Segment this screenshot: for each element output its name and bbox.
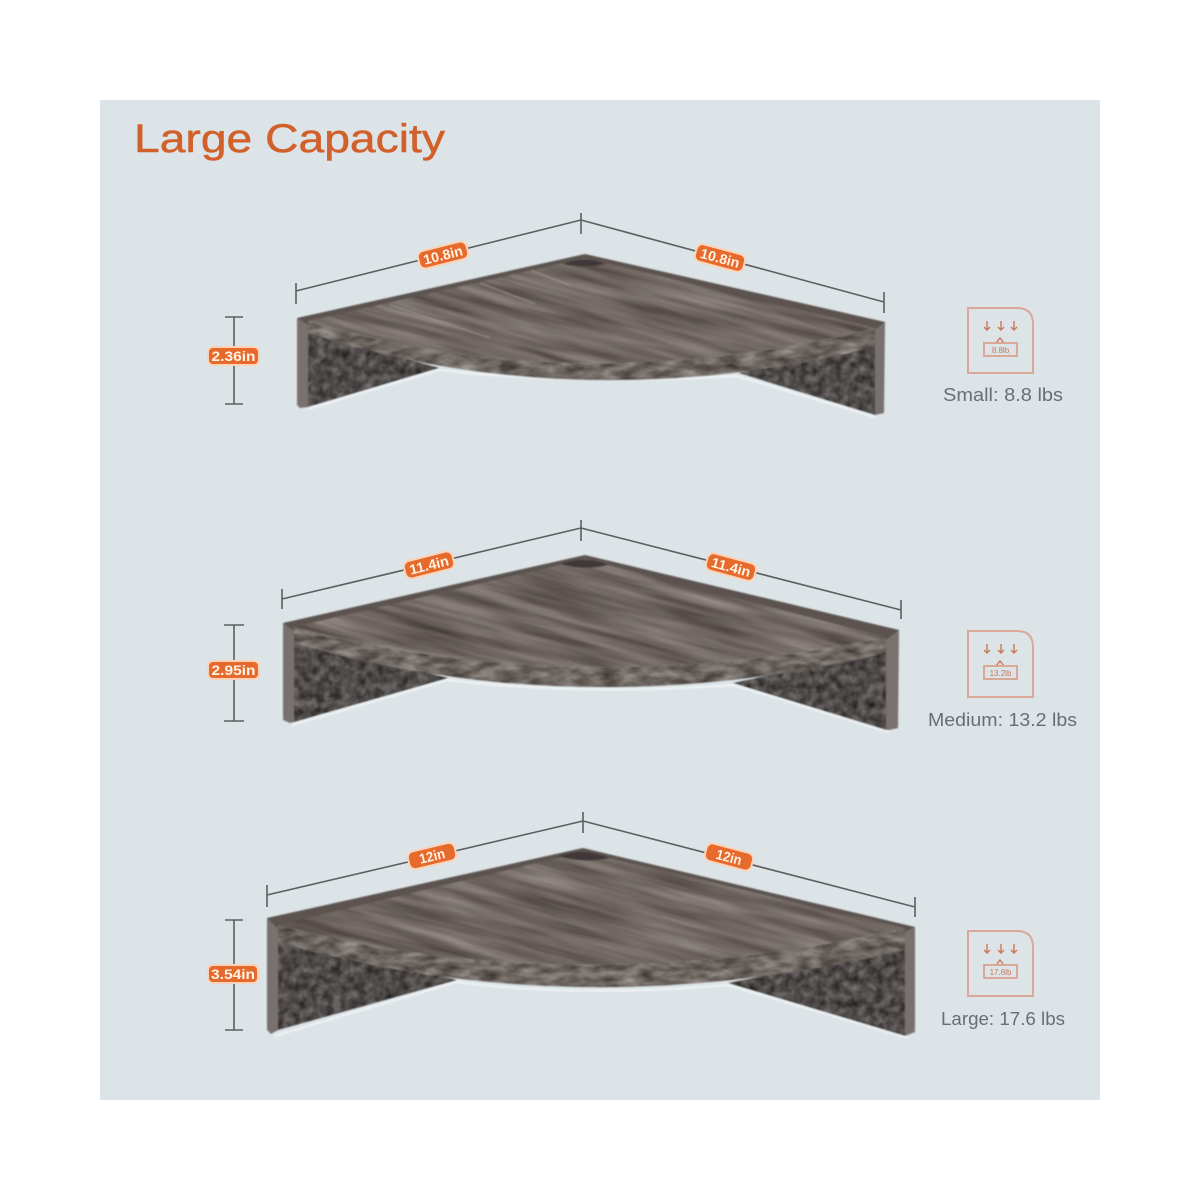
- panel: background: [100, 100, 1100, 1100]
- large width dimension left: 12in: [417, 845, 447, 867]
- large height dimension: [208, 920, 258, 1030]
- large width dimension right: [583, 821, 915, 917]
- medium height dimension: 2.95in: [212, 662, 256, 678]
- icon: small weight capacity: 8.8lb: [992, 346, 1010, 355]
- medium width dimension right: 11.4in: [710, 554, 752, 580]
- icon: large weight capacity: 17.6lb: [990, 968, 1012, 977]
- icon: small weight capacity: [968, 308, 1033, 373]
- medium height dimension: [208, 625, 259, 721]
- label: small capacity: Small: 8.8 lbs: [943, 385, 1063, 405]
- label: large capacity: Large: 17.6 lbs: [941, 1009, 1065, 1029]
- title: Large Capacity: [134, 117, 445, 161]
- small width dimension right: 10.8in: [699, 245, 741, 271]
- label: medium capacity: Medium: 13.2 lbs: [928, 710, 1077, 730]
- icon: large weight capacity: [968, 931, 1033, 996]
- icon: medium weight capacity: [968, 631, 1033, 697]
- small shelf: [296, 253, 886, 418]
- medium shelf: [282, 554, 900, 732]
- large height dimension: 3.54in: [211, 966, 255, 982]
- small height dimension: [208, 317, 259, 404]
- large width dimension right: 12in: [714, 846, 744, 868]
- small width dimension left: 10.8in: [422, 242, 464, 268]
- icon: medium weight capacity: 13.2lb: [990, 669, 1012, 678]
- small width dimension left: [296, 213, 581, 304]
- large shelf: [266, 847, 916, 1038]
- medium width dimension left: [282, 520, 581, 609]
- small height dimension: 2.36in: [212, 348, 256, 364]
- medium width dimension right: [581, 528, 901, 619]
- large width dimension left: [267, 812, 583, 907]
- medium width dimension left: 11.4in: [408, 552, 450, 578]
- small width dimension right: [581, 220, 884, 313]
